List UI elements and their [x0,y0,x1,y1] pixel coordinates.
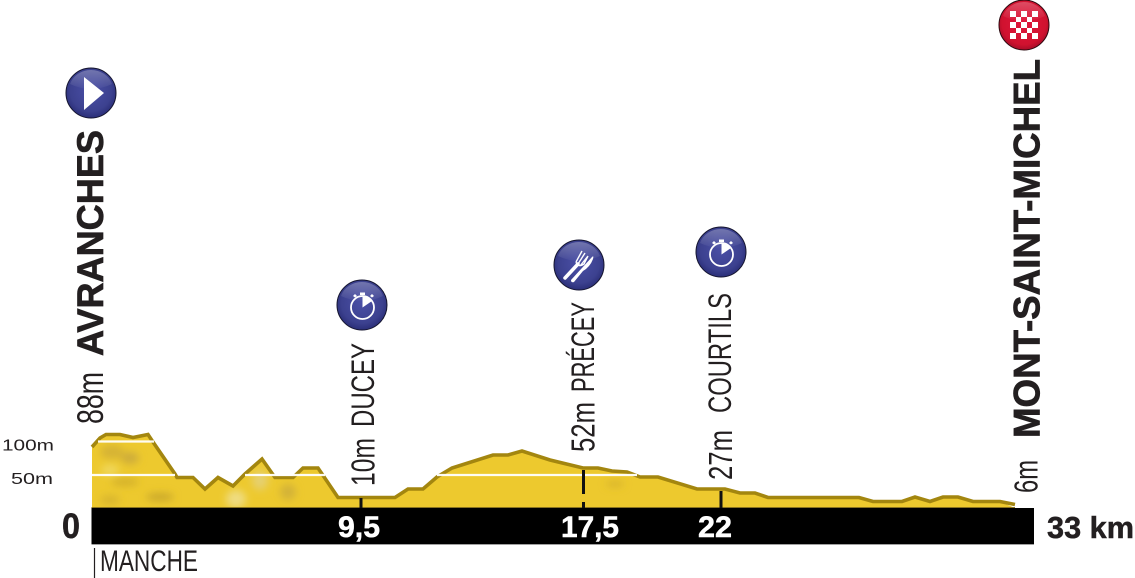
icon: start play button [66,68,116,118]
km values [338,511,732,544]
km values: 9,5 [338,511,380,544]
km ticks [361,470,721,508]
Courtils label [702,293,739,480]
department label: MANCHE [100,545,198,578]
Précey label [564,302,602,452]
axis labels [2,438,80,546]
finish town label: MONT-SAINT-MICHEL [1006,59,1048,438]
Précey label: PRÉCEY [565,302,601,392]
start town label: 88m [70,372,111,424]
km values: 17,5 [561,511,619,544]
icon: fork and knife Précey [554,240,604,290]
elevation profile [90,430,1020,510]
start town label: AVRANCHES [70,130,111,356]
finish town label: 6m [1008,460,1044,493]
icon: finish checkered flag [999,0,1049,50]
Courtils label: 27m [702,430,739,480]
icon: stopwatch Ducey [337,280,387,330]
Ducey label: 10m [344,438,382,486]
Ducey label [344,343,382,486]
km values: 22 [698,511,732,544]
axis labels: 0 [62,507,80,546]
distance bar [92,508,1034,544]
axis labels: 50m [11,471,53,488]
icon: stopwatch Courtils [696,227,746,277]
Précey label: 52m [564,402,602,452]
profile outline [92,434,1015,504]
Courtils label: COURTILS [702,293,738,413]
axis labels: 100m [2,438,54,454]
total distance: 33 km [1047,510,1134,545]
altitude gridlines [92,442,637,475]
Ducey label: DUCEY [345,343,381,427]
